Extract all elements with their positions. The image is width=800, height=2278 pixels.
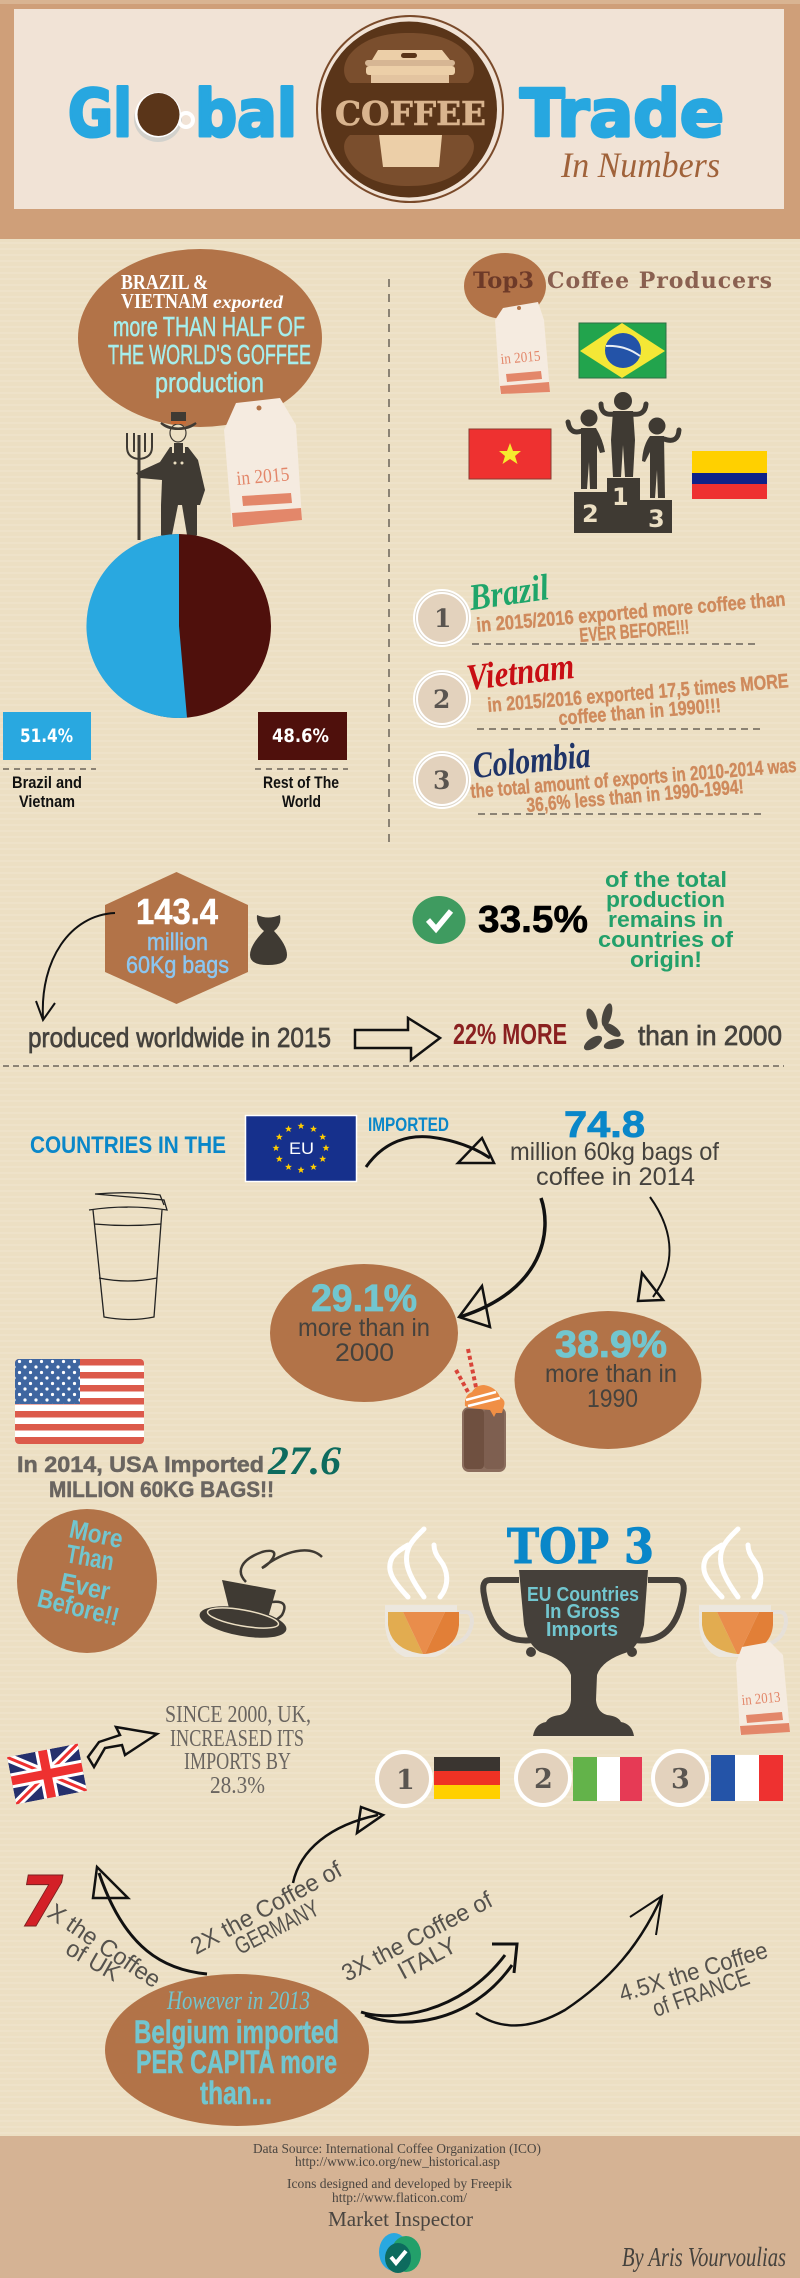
icon: teacup with steam bbox=[197, 1550, 322, 1643]
icon: podium with winners: 3 bbox=[648, 505, 665, 533]
rank 3: Colombia: 36,6% less than in 1990-1994! bbox=[526, 776, 745, 817]
logo: coffee badge: COFFEE bbox=[335, 94, 486, 133]
bubble: 29.1%: 2000 bbox=[335, 1339, 394, 1367]
legend: Brazil and Vietnam: 51.4% bbox=[20, 725, 73, 747]
text: than in 2000: than in 2000 bbox=[638, 1020, 782, 1051]
arrow: to Germany bbox=[293, 1807, 383, 1883]
text: since 2000 UK: INCREASED ITS bbox=[170, 1726, 304, 1752]
rank row: Germany bbox=[375, 1750, 500, 1808]
text: of the total production bbox=[598, 867, 734, 972]
icon: tea cup left bbox=[385, 1529, 472, 1657]
icon: trophy: EU Countries bbox=[527, 1584, 639, 1606]
text: of the total production: countries of bbox=[598, 927, 734, 952]
bubble: 29.1%: 29.1% bbox=[311, 1278, 417, 1320]
icon: price tag in 2013: in 2013 bbox=[741, 1690, 781, 1709]
bubble: Belgium per capita: PER CAPITA more bbox=[136, 2044, 337, 2080]
data source credits: Data Source: International Coffee Organization (ICO) bbox=[253, 2142, 541, 2157]
bubble: Belgium per capita: than... bbox=[200, 2075, 272, 2111]
stat: 74.8: 74.8 bbox=[564, 1104, 645, 1145]
text: USA imported: MILLION 60KG BAGS!! bbox=[49, 1477, 274, 1502]
text: of the total production: origin! bbox=[630, 947, 702, 972]
text: of the total production: of the total bbox=[605, 867, 727, 892]
legend: Rest of the World: World bbox=[282, 792, 321, 811]
icon: podium with winners: 2 bbox=[582, 500, 599, 528]
icon: price tag in 2015 small bbox=[495, 302, 550, 394]
rank 1: Brazil bbox=[413, 567, 786, 647]
text: of the total production: production bbox=[606, 887, 725, 912]
bubble: more than ever before: Than bbox=[64, 1538, 116, 1576]
text: USA imported: 27.6 bbox=[267, 1438, 341, 1483]
bubble: more than ever before: More bbox=[67, 1514, 126, 1554]
heading: top 3 producers: Coffee Producers bbox=[547, 268, 772, 294]
arrow: to 29.1% bbox=[459, 1198, 545, 1327]
text: since 2000 UK: SINCE 2000, UK, bbox=[165, 1702, 311, 1728]
flag: EU: EU bbox=[289, 1139, 314, 1158]
hexagon: 143.4 million bags bbox=[105, 872, 248, 1004]
icon: number 7: 7 bbox=[12, 1861, 70, 1943]
bubble: 38.9%: 1990 bbox=[587, 1385, 638, 1413]
rank 3: Colombia: Colombia bbox=[471, 735, 592, 787]
arrow: to UK bbox=[93, 1867, 207, 1974]
title: Trade: Trade bbox=[520, 77, 724, 152]
text: 4.5X the coffee of France: of FRANCE bbox=[649, 1963, 753, 2023]
bubble: 38.9% bbox=[514, 1311, 702, 1449]
text: of the total production: remains in bbox=[608, 907, 723, 932]
panel: export share bubble bbox=[78, 249, 322, 427]
bubble: more than ever before bbox=[17, 1509, 157, 1653]
rank row: Germany: 1 bbox=[396, 1765, 415, 1796]
text: 22% more: 22% MORE bbox=[453, 1019, 567, 1051]
icon: milkshake bbox=[456, 1349, 506, 1472]
heading: top 3: TOP 3 bbox=[507, 1519, 654, 1575]
panel: export share bubble: BRAZIL & bbox=[121, 270, 208, 294]
data source credits: http://www.ico.org/new_historical.asp bbox=[295, 2155, 500, 2170]
hexagon: 143.4 million bags: 143.4 bbox=[136, 891, 218, 932]
icon: green check bbox=[412, 896, 466, 944]
legend: Brazil and Vietnam: Brazil and bbox=[12, 773, 82, 792]
footer bbox=[0, 2136, 800, 2278]
rank 1: Brazil: EVER BEFORE!!! bbox=[579, 616, 690, 647]
heading: top 3 producers: Top3 bbox=[473, 268, 534, 294]
text: since 2000 UK: IMPORTS BY bbox=[184, 1749, 291, 1775]
rank row: France bbox=[651, 1749, 783, 1807]
title: Gl: Gl bbox=[68, 77, 132, 152]
bubble: 29.1% bbox=[270, 1264, 458, 1402]
heading: top 3 producers bbox=[464, 253, 772, 319]
icon: price tag in 2013 bbox=[736, 1642, 790, 1735]
icon: coffee cup as letter o bbox=[134, 92, 193, 142]
icon: trophy: In Gross bbox=[545, 1601, 620, 1623]
header banner bbox=[0, 0, 800, 239]
icon: farmer with pitchfork bbox=[127, 412, 205, 540]
bubble: 38.9%: 38.9% bbox=[555, 1324, 667, 1366]
stat: 33.5%: 33.5% bbox=[478, 899, 588, 941]
heading: countries in the: COUNTRIES IN THE bbox=[30, 1132, 226, 1159]
text: X the coffee of UK: of UK bbox=[61, 1935, 125, 1987]
arrow: hexagon to produced bbox=[36, 913, 115, 1020]
text: since 2000 UK: 28.3% bbox=[210, 1773, 265, 1799]
flag: USA bbox=[15, 1359, 144, 1444]
rank row: Italy bbox=[514, 1749, 642, 1807]
icon: price tag in 2015 small: in 2015 bbox=[500, 349, 541, 368]
arrow: to 38.9% bbox=[638, 1197, 669, 1301]
logo: Market Inspector bbox=[379, 2233, 421, 2273]
rank 3: Colombia bbox=[413, 735, 797, 817]
bubble: Belgium per capita bbox=[105, 1974, 369, 2126]
icon: price tag in 2015: in 2015 bbox=[236, 463, 290, 490]
bubble: more than ever before: Ever bbox=[58, 1567, 113, 1606]
text: imported: IMPORTED bbox=[368, 1115, 449, 1136]
icon: takeaway cup outline bbox=[89, 1193, 167, 1320]
panel: export share bubble: THE WORLD'S GOFFEE bbox=[108, 339, 311, 370]
rank 1: Brazil: Brazil bbox=[466, 567, 552, 619]
arrow: imported to 74.8 bbox=[366, 1137, 494, 1167]
text: USA imported bbox=[17, 1438, 341, 1502]
brand: Market Inspector: Market Inspector bbox=[328, 2207, 473, 2231]
legend: Rest of the World: Rest of The bbox=[263, 773, 339, 792]
text: USA imported: In 2014, USA Imported bbox=[17, 1452, 264, 1477]
bubble: Belgium per capita: However in 2013 bbox=[166, 1986, 310, 2015]
icon: money bag bbox=[250, 915, 287, 965]
text: 2X the coffee of Germany: 2X the Coffee of bbox=[186, 1856, 347, 1960]
arrow: to Italy bbox=[361, 1944, 517, 2022]
rank row: France: 3 bbox=[671, 1764, 690, 1795]
text: 4.5X the coffee of France: 4.5X the Coffee bbox=[616, 1937, 771, 2008]
data source credits: Icons designed and developed by Freepik bbox=[287, 2177, 512, 2192]
hexagon: 143.4 million bags: million bbox=[147, 929, 208, 956]
panel: export share bubble: more THAN HALF OF bbox=[113, 311, 305, 342]
bubble: 38.9%: more than in bbox=[545, 1360, 677, 1388]
rank 2: Vietnam: 2 bbox=[433, 685, 450, 714]
text: X the coffee of UK: X the Coffee bbox=[43, 1899, 166, 1994]
bubble: 29.1%: more than in bbox=[298, 1314, 430, 1342]
text: 3X the coffee of Italy: 3X the Coffee of bbox=[337, 1887, 497, 1987]
text: produced worldwide: produced worldwide in 2015 bbox=[28, 1022, 331, 1053]
text: since 2000 UK bbox=[165, 1702, 311, 1799]
icon: trophy: Imports bbox=[546, 1619, 618, 1641]
panel: export share bubble: VIETNAM bbox=[121, 289, 208, 313]
rank 2: Vietnam: coffee than in 1990!!! bbox=[558, 695, 722, 730]
data source credits: http://www.flaticon.com/ bbox=[332, 2191, 467, 2206]
icon: tea cup right bbox=[699, 1529, 786, 1657]
icon: podium with winners: 1 bbox=[612, 483, 629, 511]
rank 1: Brazil: 1 bbox=[434, 604, 451, 633]
arrow: to France bbox=[476, 1896, 662, 2025]
icon: podium with winners bbox=[568, 392, 679, 533]
flag: Colombia bbox=[692, 451, 767, 499]
arrow: UK increase bbox=[88, 1727, 157, 1767]
icon: price tag in 2015 bbox=[224, 398, 302, 527]
rank 2: Vietnam: Vietnam bbox=[464, 646, 576, 699]
legend: Brazil and Vietnam bbox=[3, 712, 96, 811]
legend: Rest of the World bbox=[255, 712, 348, 811]
legend: Brazil and Vietnam: Vietnam bbox=[19, 792, 75, 811]
text: million bags of coffee: coffee in 2014 bbox=[536, 1163, 695, 1191]
title: bal: bal bbox=[195, 77, 297, 152]
icon: trophy bbox=[483, 1570, 684, 1736]
hexagon: 143.4 million bags: 60Kg bags bbox=[126, 952, 229, 979]
flag: UK bbox=[7, 1744, 87, 1804]
text: million bags of coffee: million 60kg bags of bbox=[510, 1138, 719, 1166]
panel: export share bubble: exported bbox=[213, 292, 284, 312]
pie chart bbox=[86, 534, 271, 718]
flag: Vietnam bbox=[469, 429, 551, 479]
flag: EU bbox=[246, 1116, 356, 1182]
panel: export share bubble: production bbox=[155, 367, 264, 398]
data source credits bbox=[253, 2142, 541, 2206]
rank row: Italy: 2 bbox=[534, 1764, 553, 1795]
rank 2: Vietnam bbox=[413, 646, 789, 730]
bubble: Belgium per capita: Belgium imported bbox=[134, 2014, 339, 2050]
rank 3: Colombia: 3 bbox=[433, 766, 450, 795]
legend: Rest of the World: 48.6% bbox=[272, 725, 329, 747]
text: 3X the coffee of Italy: ITALY bbox=[393, 1932, 461, 1985]
logo: coffee badge bbox=[316, 15, 504, 203]
icon: coffee beans bbox=[582, 1002, 625, 1053]
text: million bags of coffee bbox=[510, 1138, 719, 1191]
arrow: outline right bbox=[355, 1018, 440, 1060]
bubble: more than ever before: Before!! bbox=[35, 1583, 122, 1632]
flag: Brazil bbox=[579, 323, 666, 378]
text: 2X the coffee of Germany: GERMANY bbox=[230, 1895, 324, 1960]
subtitle: In Numbers bbox=[560, 145, 720, 185]
